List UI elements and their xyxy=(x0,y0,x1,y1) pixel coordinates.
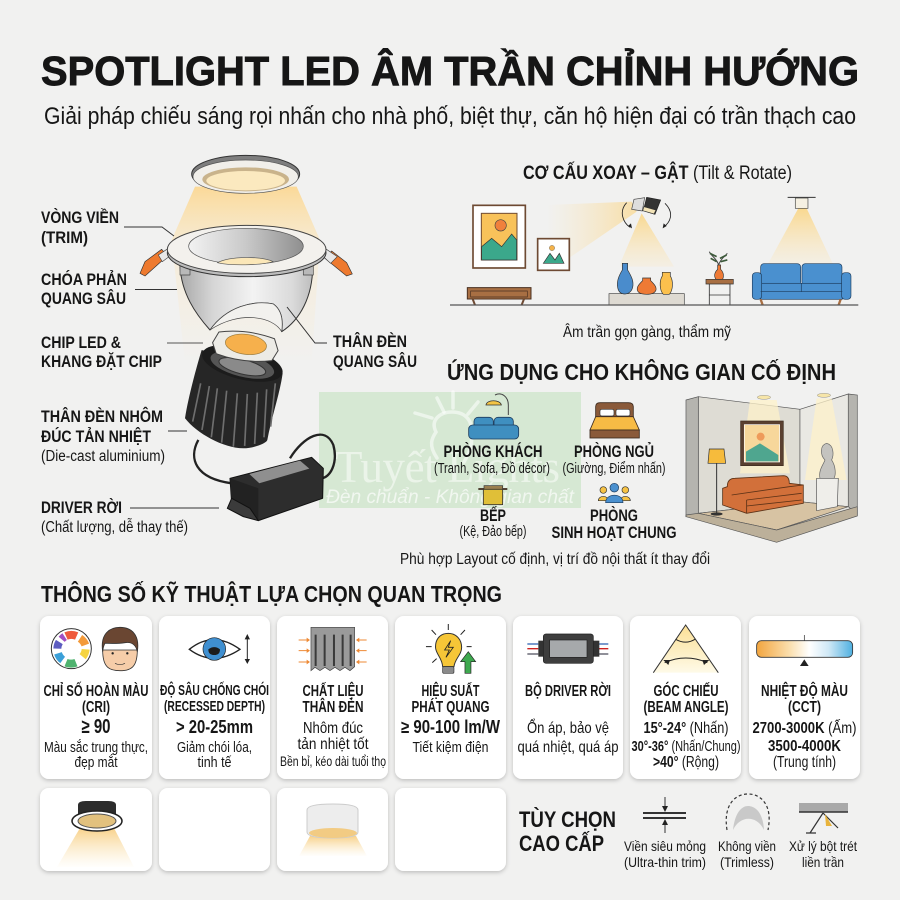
icon: bed xyxy=(590,403,639,438)
card: black downlight xyxy=(40,788,152,871)
panel: tilt and rotate xyxy=(450,162,858,341)
card: driver xyxy=(513,616,623,779)
card text: luminous efficacy: Tiết kiệm điện xyxy=(412,739,488,756)
card text: recessed depth xyxy=(160,681,269,771)
card text: recessed depth: > 20-25mm xyxy=(176,717,253,737)
option: plaster-in: liền trần xyxy=(802,854,844,870)
card text: luminous efficacy: HIỆU SUẤT xyxy=(422,681,480,700)
option: ultra-thin trim: (Ultra-thin trim) xyxy=(624,854,706,870)
room labels: (Tranh, Sofa, Đồ décor) xyxy=(434,461,550,477)
room labels xyxy=(434,442,676,542)
icon: cct scale xyxy=(757,635,853,666)
icon: beam fan xyxy=(653,625,718,673)
title: SPOTLIGHT LED ÂM TRẦN CHỈNH HƯỚNG xyxy=(41,48,859,94)
card text: colour temperature xyxy=(752,681,856,771)
option: plaster-in xyxy=(789,803,857,870)
room labels: (Kệ, Đảo bếp) xyxy=(460,524,526,540)
card text: colour temperature: NHIỆT ĐỘ MÀU xyxy=(761,681,848,700)
label: die-cast body: THÂN ĐÈN NHÔM xyxy=(41,407,163,426)
card text: CRI xyxy=(44,680,148,771)
option: ultra-thin trim: Viền siêu mỏng xyxy=(624,838,706,854)
card text: CRI: (CRI) xyxy=(82,699,110,716)
card: CRI xyxy=(40,616,152,779)
card text: colour temperature: 2700-3000K (Ấm) xyxy=(752,718,856,737)
card text: CRI: đẹp mắt xyxy=(74,754,118,771)
label: trim xyxy=(41,208,174,247)
room corner illustration xyxy=(686,393,857,542)
icon: living room sofa and lamp xyxy=(469,394,519,439)
card text: CRI: CHỈ SỐ HOÀN MÀU xyxy=(44,680,148,700)
label: led chip xyxy=(41,334,203,371)
label: reflector xyxy=(41,270,177,308)
label: die-cast body: (Die-cast aluminium) xyxy=(41,448,165,465)
icon: driver box xyxy=(527,634,608,663)
card: colour temperature xyxy=(749,616,860,779)
label: led chip: CHIP LED & xyxy=(41,334,121,352)
card text: beam angle: (BEAM ANGLE) xyxy=(644,699,728,716)
card: body material xyxy=(277,616,388,779)
card text: body material: Nhôm đúc xyxy=(303,720,363,737)
label: reflector: QUANG SÂU xyxy=(41,289,126,308)
card: recessed depth xyxy=(159,616,270,779)
label: deep body: THÂN ĐÈN xyxy=(333,332,407,351)
heading: tilt and rotate: CƠ CẤU XOAY – GẬT (Tilt & Rotate) xyxy=(523,162,792,184)
icon: people group xyxy=(598,483,630,503)
label: deep body xyxy=(287,307,417,371)
card text: luminous efficacy: ≥ 90-100 lm/W xyxy=(401,717,500,737)
option: trimless xyxy=(718,794,776,870)
watermark xyxy=(319,392,581,508)
option: trimless: Không viền xyxy=(718,838,776,854)
watermark: Tuyết Lights xyxy=(335,442,560,492)
icon: cooking pot xyxy=(478,486,507,505)
card text: body material: THÂN ĐÈN xyxy=(302,697,364,716)
card text: luminous efficacy: PHÁT QUANG xyxy=(412,697,490,716)
card text: driver: BỘ DRIVER RỜI xyxy=(525,681,611,700)
label: die-cast body xyxy=(41,407,187,465)
card text: recessed depth: tinh tế xyxy=(198,754,232,771)
card text: colour temperature: (CCT) xyxy=(788,699,821,716)
label: driver xyxy=(41,498,219,536)
label: led chip: KHANG ĐẶT CHIP xyxy=(41,352,162,371)
card text: colour temperature: 3500-4000K xyxy=(768,738,841,755)
label: reflector: CHÓA PHẢN xyxy=(41,270,127,289)
card text: driver xyxy=(518,681,619,756)
icon: heat sink with arrows xyxy=(299,627,367,671)
card: white surface light xyxy=(277,788,388,871)
card text: driver: quá nhiệt, quá áp xyxy=(518,739,619,756)
icon: downlight with beam xyxy=(57,801,134,867)
watermark: Đèn chuẩn - Không gian chất xyxy=(326,487,575,508)
label: driver: (Chất lượng, dễ thay thế) xyxy=(41,519,188,536)
label: die-cast body: ĐÚC TẢN NHIỆT xyxy=(41,427,151,446)
heading: applications: ỨNG DỤNG CHO KHÔNG GIAN CỐ ĐỊNH xyxy=(447,358,836,385)
icon: colour wheel and face xyxy=(51,627,138,671)
card text: beam angle: >40° (Rộng) xyxy=(653,754,719,771)
card text: body material: Bền bỉ, kéo dài tuổi thọ xyxy=(280,753,386,769)
room labels: PHÒNG KHÁCH xyxy=(444,442,542,461)
icon: light bulb xyxy=(426,624,476,673)
heading: premium options: CAO CẤP xyxy=(519,831,604,856)
card: beam angle xyxy=(630,616,741,779)
card text: beam angle xyxy=(632,681,741,771)
option: plaster-in: Xử lý bột trét xyxy=(789,838,857,854)
label: trim: VÒNG VIỀN xyxy=(41,208,119,227)
card: luminous efficacy xyxy=(395,616,506,779)
card text: body material xyxy=(280,681,386,769)
room scene xyxy=(450,197,858,305)
room labels: SINH HOẠT CHUNG xyxy=(552,524,676,542)
label: trim: (TRIM) xyxy=(41,229,88,247)
option: ultra-thin trim xyxy=(624,797,706,870)
icon: cylinder light with beam xyxy=(299,804,367,856)
exploded lamp illustration xyxy=(140,155,352,521)
option: trimless: (Trimless) xyxy=(720,854,774,870)
card text: recessed depth: Giảm chói lóa, xyxy=(177,739,252,756)
card text: beam angle: GÓC CHIẾU xyxy=(654,681,718,700)
card text: recessed depth: ĐỘ SÂU CHỐNG CHÓI xyxy=(160,681,269,699)
card text: colour temperature: (Trung tính) xyxy=(773,754,836,771)
label: deep body: QUANG SÂU xyxy=(333,352,417,371)
card text: body material: CHẤT LIỆU xyxy=(302,681,364,700)
section heading: key specs: THÔNG SỐ KỸ THUẬT LỰA CHỌN QUAN TRỌNG xyxy=(41,580,502,607)
heading: premium options xyxy=(519,807,616,856)
card text: driver: Ổn áp, bảo vệ xyxy=(527,718,609,737)
room labels: BẾP xyxy=(480,506,506,525)
caption: fixed layout: Phù hợp Layout cố định, vị trí đồ nội thất ít thay đổi xyxy=(400,550,710,568)
room labels: PHÒNG NGỦ xyxy=(574,442,654,461)
heading: premium options: TÙY CHỌN xyxy=(519,807,616,832)
panel: premium options xyxy=(519,794,857,870)
room labels: PHÒNG xyxy=(590,506,638,525)
card text: CRI: Màu sắc trung thực, xyxy=(44,739,148,756)
card: empty option 4 xyxy=(395,788,506,871)
card: empty option 2 xyxy=(159,788,270,871)
card text: CRI: ≥ 90 xyxy=(82,716,110,738)
caption: tidy ceiling: Âm trần gọn gàng, thẩm mỹ xyxy=(563,322,731,341)
card text: recessed depth: (RECESSED DEPTH) xyxy=(164,698,265,715)
card text: luminous efficacy xyxy=(401,681,500,756)
card text: beam angle: 15°-24° (Nhấn) xyxy=(644,720,728,737)
panel: fixed space applications xyxy=(400,358,857,568)
room labels: (Giường, Điểm nhấn) xyxy=(562,461,666,477)
panel: exploded lamp diagram xyxy=(41,155,417,536)
card text: body material: tản nhiệt tốt xyxy=(298,736,369,753)
label: driver: DRIVER RỜI xyxy=(41,498,122,517)
card text: beam angle: 30°-36° (Nhấn/Chung) xyxy=(632,738,741,755)
icon: eye and arrow xyxy=(189,634,250,664)
